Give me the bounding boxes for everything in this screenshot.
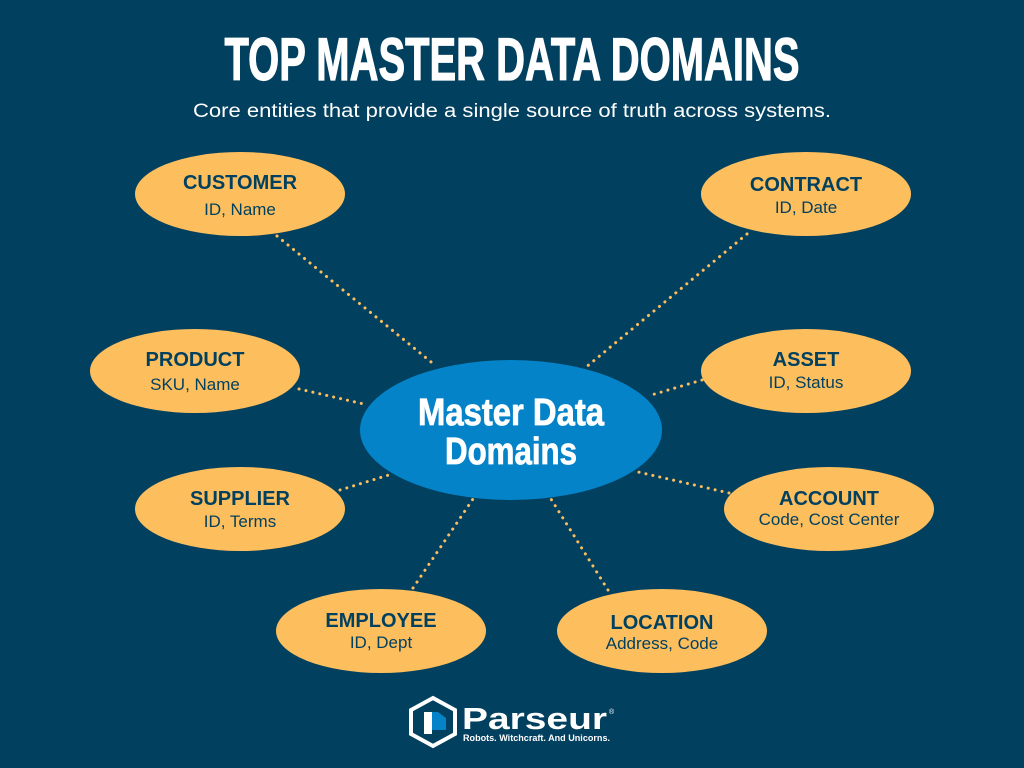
logo	[411, 698, 615, 746]
node: customer: CUSTOMER	[183, 172, 298, 194]
node: location	[557, 589, 767, 673]
subtitle: Core entities that provide a single source of truth across systems.	[193, 101, 831, 122]
node: location: LOCATION	[611, 612, 713, 634]
node: employee: ID, Dept	[350, 633, 412, 652]
node: account: Code, Cost Center	[759, 510, 900, 529]
node: supplier: SUPPLIER	[190, 488, 291, 510]
center node: Domains	[445, 431, 577, 473]
node: account	[724, 467, 934, 551]
node: contract: ID, Date	[775, 198, 837, 217]
node: location: Address, Code	[606, 634, 718, 653]
node: employee	[276, 589, 486, 673]
node: product: SKU, Name	[150, 375, 240, 394]
node: supplier	[135, 467, 345, 551]
node: contract: CONTRACT	[750, 174, 862, 196]
node: asset: ID, Status	[769, 373, 843, 392]
node: product: PRODUCT	[146, 349, 244, 371]
center node	[360, 360, 662, 500]
logo: Robots. Witchcraft. And Unicorns.	[463, 733, 610, 743]
logo: ®	[609, 708, 615, 716]
node: asset	[701, 329, 911, 413]
node: product	[90, 329, 300, 413]
node: customer	[135, 152, 345, 236]
center node: Master Data	[418, 392, 605, 434]
node: contract	[701, 152, 911, 236]
node: asset: ASSET	[773, 349, 839, 371]
node: employee: EMPLOYEE	[325, 610, 437, 632]
icon: parseur hexagon	[411, 698, 455, 746]
logo: Parseur	[462, 701, 607, 736]
node: supplier: ID, Terms	[204, 512, 276, 531]
node: customer: ID, Name	[204, 200, 276, 219]
connector lines	[277, 234, 747, 590]
node: account: ACCOUNT	[779, 488, 879, 510]
